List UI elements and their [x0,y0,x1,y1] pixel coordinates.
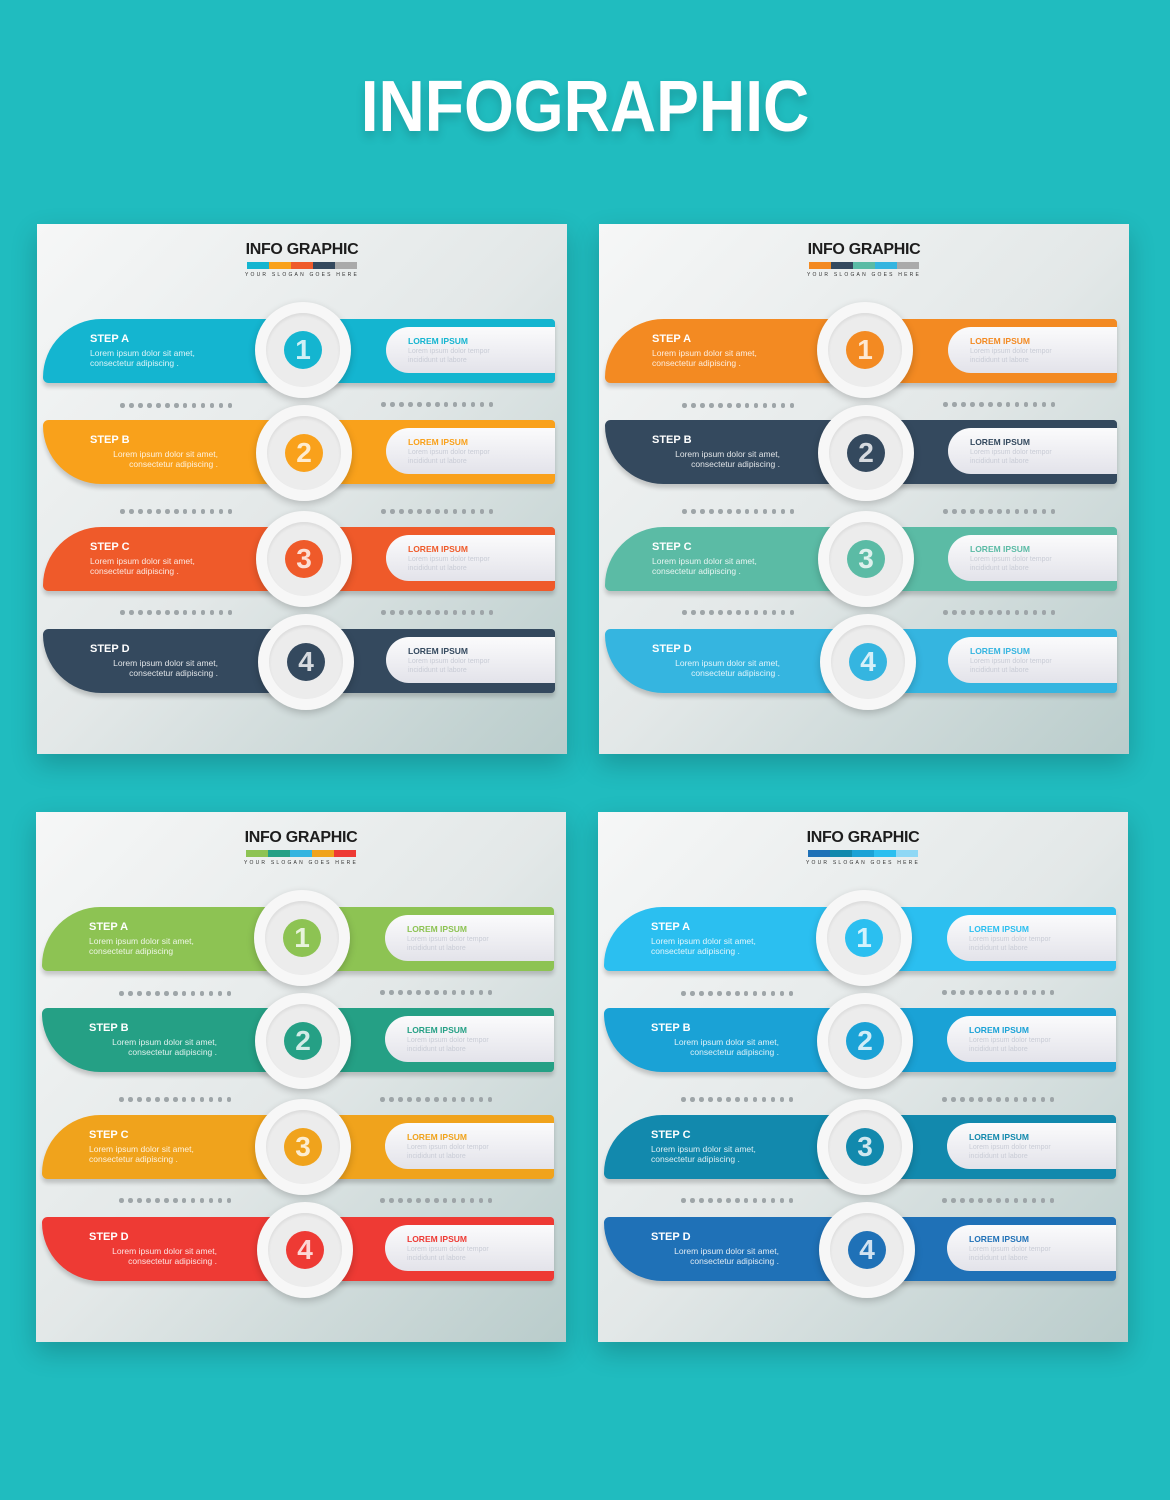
header [807,241,921,278]
step D [604,1217,1116,1281]
step D: STEP D [652,643,692,655]
step C: STEP C [90,541,130,553]
step A: Lorem ipsum dolor tempor [407,936,489,943]
circle 2: 2 [858,437,874,468]
step A: LOREM IPSUM [407,924,467,934]
step C: Lorem ipsum dolor tempor [407,1144,489,1151]
step A: LOREM IPSUM [408,336,468,346]
step B: consectetur adipiscing . [690,1047,779,1057]
step D [42,1217,554,1281]
step D: Lorem ipsum dolor sit amet, [113,658,218,668]
circle 1: 1 [295,334,311,365]
step C: Lorem ipsum dolor sit amet, [90,556,195,566]
step C: STEP C [652,541,692,553]
title: INFOGRAPHIC [361,67,809,147]
step B: Lorem ipsum dolor tempor [407,1037,489,1044]
circle 3 [818,511,914,607]
step D: Lorem ipsum dolor tempor [969,1246,1051,1253]
header: INFO GRAPHIC [808,241,920,258]
step C: incididunt ut labore [407,1153,466,1160]
step C: STEP C [651,1129,691,1141]
step B: consectetur adipiscing . [129,459,218,469]
circle 2: 2 [857,1025,873,1056]
step B: Lorem ipsum dolor sit amet, [675,449,780,459]
step A: LOREM IPSUM [970,336,1030,346]
step C: Lorem ipsum dolor tempor [970,556,1052,563]
step C: incididunt ut labore [969,1153,1028,1160]
circle 2 [818,405,914,501]
circle 3 [817,1099,913,1195]
circle 4 [257,1202,353,1298]
step C: LOREM IPSUM [407,1132,467,1142]
step D: consectetur adipiscing . [691,668,780,678]
step C [43,527,555,591]
step A: Lorem ipsum dolor tempor [970,348,1052,355]
header: YOUR SLOGAN GOES HERE [806,860,920,866]
circle 2 [255,993,351,1089]
step D: Lorem ipsum dolor sit amet, [112,1246,217,1256]
step C: Lorem ipsum dolor sit amet, [651,1144,756,1154]
panel: bottom-right [598,812,1128,1342]
step B: consectetur adipiscing . [128,1047,217,1057]
circle 2 [817,993,913,1089]
circle 2: 2 [295,1025,311,1056]
step A: STEP A [89,921,128,933]
step D: LOREM IPSUM [408,646,468,656]
circle 3: 3 [296,543,312,574]
step D: STEP D [89,1231,129,1243]
step D: consectetur adipiscing . [690,1256,779,1266]
step A: incididunt ut labore [408,357,467,364]
step B: Lorem ipsum dolor tempor [408,449,490,456]
step A [43,319,555,383]
step A: consectetur adipiscing . [651,946,740,956]
step A: STEP A [90,333,129,345]
step C: LOREM IPSUM [970,544,1030,554]
step C: consectetur adipiscing . [651,1154,740,1164]
step A: incididunt ut labore [407,945,466,952]
step B: Lorem ipsum dolor tempor [969,1037,1051,1044]
step C: STEP C [89,1129,129,1141]
step D: Lorem ipsum dolor tempor [407,1246,489,1253]
step B: incididunt ut labore [970,458,1029,465]
step B [604,1008,1116,1072]
step A: STEP A [651,921,690,933]
step B: STEP B [651,1022,691,1034]
step B: Lorem ipsum dolor sit amet, [112,1037,217,1047]
step A [604,907,1116,971]
header: INFO GRAPHIC [807,829,919,846]
step A: consectetur adipiscing . [652,358,741,368]
step A: consectetur adipiscing [89,946,173,956]
step A [42,907,554,971]
step B: LOREM IPSUM [969,1025,1029,1035]
step D: Lorem ipsum dolor tempor [408,658,490,665]
header [245,241,359,278]
circle 3: 3 [857,1131,873,1162]
step D: LOREM IPSUM [969,1234,1029,1244]
circle 3: 3 [295,1131,311,1162]
circle 1 [254,890,350,986]
step A: Lorem ipsum dolor sit amet, [90,348,195,358]
step D: incididunt ut labore [408,667,467,674]
step D: consectetur adipiscing . [129,668,218,678]
step C: consectetur adipiscing . [90,566,179,576]
step A: incididunt ut labore [970,357,1029,364]
circle 3 [256,511,352,607]
step A: consectetur adipiscing . [90,358,179,368]
circle 4: 4 [859,1234,875,1265]
step D: incididunt ut labore [969,1255,1028,1262]
step A: Lorem ipsum dolor tempor [969,936,1051,943]
header: INFO GRAPHIC [246,241,358,258]
step B: LOREM IPSUM [408,437,468,447]
step B: Lorem ipsum dolor sit amet, [113,449,218,459]
step C: incididunt ut labore [408,565,467,572]
circle 4 [819,1202,915,1298]
step B: Lorem ipsum dolor tempor [970,449,1052,456]
step A [605,319,1117,383]
step B: incididunt ut labore [969,1046,1028,1053]
step D: Lorem ipsum dolor sit amet, [675,658,780,668]
step C [604,1115,1116,1179]
step C: consectetur adipiscing . [89,1154,178,1164]
step D [43,629,555,693]
step B: Lorem ipsum dolor sit amet, [674,1037,779,1047]
header: YOUR SLOGAN GOES HERE [244,860,358,866]
step A: Lorem ipsum dolor sit amet, [652,348,757,358]
circle 2: 2 [296,437,312,468]
step B: incididunt ut labore [408,458,467,465]
step C: consectetur adipiscing . [652,566,741,576]
step D: Lorem ipsum dolor sit amet, [674,1246,779,1256]
step A: STEP A [652,333,691,345]
step A: Lorem ipsum dolor tempor [408,348,490,355]
step B: incididunt ut labore [407,1046,466,1053]
step D: STEP D [651,1231,691,1243]
circle 4: 4 [298,646,314,677]
step B: LOREM IPSUM [970,437,1030,447]
header: YOUR SLOGAN GOES HERE [245,272,359,278]
step D: Lorem ipsum dolor tempor [970,658,1052,665]
step B: STEP B [90,434,130,446]
panel: top-right [599,224,1129,754]
circle 1 [816,890,912,986]
step B [605,420,1117,484]
header: INFO GRAPHIC [245,829,357,846]
step B: STEP B [652,434,692,446]
step C: LOREM IPSUM [969,1132,1029,1142]
header [806,829,920,866]
step D: STEP D [90,643,130,655]
circle 3: 3 [858,543,874,574]
circle 2 [256,405,352,501]
circle 1 [817,302,913,398]
step D: incididunt ut labore [407,1255,466,1262]
step D: LOREM IPSUM [970,646,1030,656]
step C: LOREM IPSUM [408,544,468,554]
circle 1: 1 [857,334,873,365]
step B: STEP B [89,1022,129,1034]
header [244,829,358,866]
step D [605,629,1117,693]
step A: Lorem ipsum dolor sit amet, [651,936,756,946]
circle 4: 4 [297,1234,313,1265]
step B: LOREM IPSUM [407,1025,467,1035]
step A: Lorem ipsum dolor sit amet, [89,936,194,946]
circle 3 [255,1099,351,1195]
circle 1 [255,302,351,398]
step B [42,1008,554,1072]
step A: LOREM IPSUM [969,924,1029,934]
circle 4 [258,614,354,710]
step D: LOREM IPSUM [407,1234,467,1244]
circle 4: 4 [860,646,876,677]
circle 4 [820,614,916,710]
panel: bottom-left [36,812,566,1342]
step B: consectetur adipiscing . [691,459,780,469]
step A: incididunt ut labore [969,945,1028,952]
step C: incididunt ut labore [970,565,1029,572]
circle 1: 1 [856,922,872,953]
step C: Lorem ipsum dolor tempor [969,1144,1051,1151]
panel: top-left [37,224,567,754]
circle 1: 1 [294,922,310,953]
step C [42,1115,554,1179]
step B [43,420,555,484]
step C [605,527,1117,591]
header: YOUR SLOGAN GOES HERE [807,272,921,278]
step C: Lorem ipsum dolor tempor [408,556,490,563]
step C: Lorem ipsum dolor sit amet, [652,556,757,566]
step D: incididunt ut labore [970,667,1029,674]
step D: consectetur adipiscing . [128,1256,217,1266]
step C: Lorem ipsum dolor sit amet, [89,1144,194,1154]
